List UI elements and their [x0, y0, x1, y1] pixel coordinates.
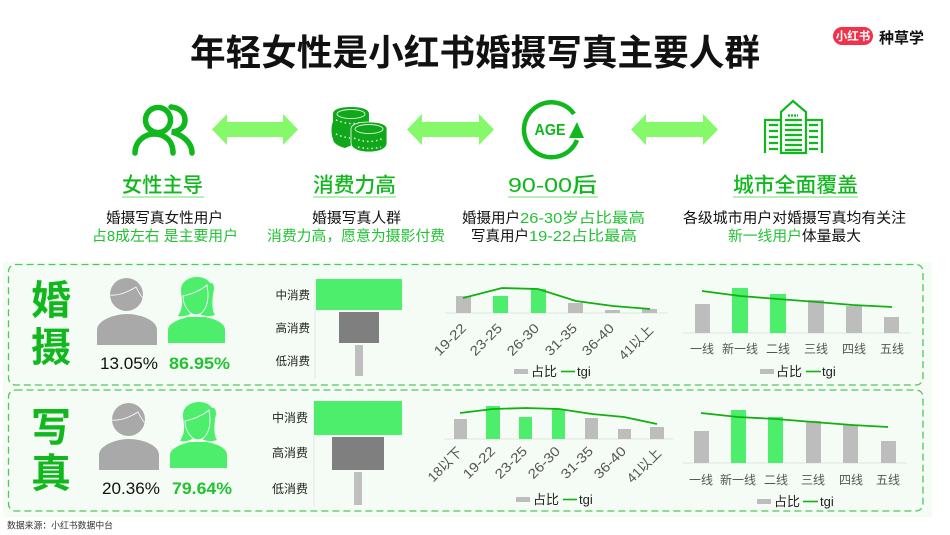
text block: city: [683, 209, 906, 245]
funnel chart: spending: 高消费: [272, 445, 308, 460]
heading: 城市全面覆盖: 城市全面覆盖: [733, 174, 858, 197]
arrow: coins to age: [407, 114, 494, 145]
text block: age: 写真用户19-22占比最高: [471, 227, 637, 245]
heading: 婚摄: 摄: [31, 326, 71, 370]
icon: age cycle: AGE: [534, 122, 566, 139]
bar line chart: city: 二线: [766, 342, 790, 356]
text block: female users: 占8成左右 是主要用户: [92, 228, 238, 245]
bar line chart: age: [425, 406, 673, 507]
bar line chart: age: 26-30: [504, 321, 542, 359]
bar line chart: age: tgi: [579, 492, 593, 507]
text block: spending: 消费力高，愿意为摄影付费: [267, 227, 445, 245]
heading: 婚摄: [31, 279, 71, 370]
icon: male user: [99, 403, 159, 470]
text block: spending: [267, 209, 445, 245]
source note: 数据来源：小红书数据中台: [7, 520, 113, 530]
icon: coins: [332, 107, 387, 152]
arrow: age to city: [631, 114, 718, 145]
heading: 写真: 真: [31, 452, 71, 496]
bar line chart: age: 占比: [531, 364, 557, 379]
icon: male user: [97, 278, 157, 345]
funnel chart: spending: 低消费: [272, 482, 308, 496]
bar line chart: city: tgi: [820, 494, 834, 509]
logo: 小红书种草学: [833, 27, 924, 47]
funnel chart: spending: [272, 401, 402, 506]
heading: 写真: [31, 406, 71, 496]
bar line chart: city: 占比: [776, 364, 802, 379]
text block: age: [462, 210, 645, 245]
panel: 写真: [8, 390, 923, 511]
heading: 婚摄: 婚: [31, 279, 71, 323]
panel: 婚摄: [8, 264, 923, 385]
male share: 20.36%: [102, 480, 160, 498]
bar line chart: city: 三线: [804, 342, 828, 356]
bar line chart: age: 31-35: [542, 321, 580, 359]
bar line chart: age: [431, 288, 668, 379]
icon: users: [135, 107, 192, 153]
title: 年轻女性是小红书婚摄写真主要人群: [190, 32, 760, 73]
male share: 13.05%: [100, 355, 158, 373]
female share: 86.95%: [169, 355, 230, 373]
icon: age cycle: [524, 102, 584, 157]
bar line chart: age: tgi: [577, 364, 591, 379]
bar line chart: city: [683, 410, 907, 509]
icon: city buildings: [765, 101, 822, 153]
bar line chart: age: 26-30: [525, 444, 563, 482]
text block: female users: 婚摄写真女性用户: [106, 209, 223, 227]
bar line chart: city: 四线: [842, 342, 866, 356]
bar line chart: age: 18以下: [425, 445, 465, 485]
text block: city: 新一线用户体量最大: [728, 228, 861, 245]
bar line chart: city: 一线: [690, 342, 714, 356]
funnel chart: spending: 中消费: [276, 288, 310, 302]
heading: 消费力高: 消费力高: [313, 174, 396, 197]
bar line chart: age: 23-25: [467, 321, 505, 359]
funnel chart: spending: 低消费: [276, 354, 310, 368]
bar line chart: city: [683, 288, 911, 379]
bar line chart: city: 四线: [839, 473, 863, 487]
bar line chart: city: 新一线: [720, 472, 756, 487]
bar line chart: age: 36-40: [579, 321, 617, 359]
bar line chart: city: 新一线: [722, 341, 758, 356]
bar line chart: age: 占比: [533, 492, 559, 507]
icon: female user: [170, 402, 227, 468]
arrow: users to coins: [212, 114, 298, 145]
bar line chart: city: tgi: [822, 364, 836, 379]
bar line chart: city: 占比: [774, 494, 800, 509]
icon: female user: [168, 277, 225, 343]
bar line chart: age: 31-35: [558, 444, 596, 482]
bar line chart: age: 19-22: [431, 321, 469, 359]
funnel chart: spending: [276, 279, 402, 378]
heading: 90-00后: 90-00后: [508, 174, 597, 197]
text block: age: 婚摄用户26-30岁占比最高: [462, 210, 645, 227]
logo: 小红书种草学: 小红书: [836, 29, 871, 43]
bar line chart: city: 三线: [801, 473, 825, 487]
bar line chart: city: 二线: [764, 473, 788, 487]
funnel chart: spending: 高消费: [276, 321, 310, 335]
bar line chart: city: 五线: [876, 473, 900, 487]
bar line chart: age: 23-25: [492, 444, 530, 482]
bar line chart: age: 41以上: [616, 323, 656, 363]
text block: spending: 婚摄写真人群: [312, 209, 401, 227]
female share: 79.64%: [172, 480, 232, 498]
text block: city: 各级城市用户对婚摄写真均有关注: [683, 209, 906, 227]
heading: 写真: 写: [31, 406, 71, 450]
text block: female users: [92, 209, 238, 245]
bar line chart: city: 五线: [880, 342, 904, 356]
funnel chart: spending: 中消费: [272, 410, 308, 425]
bar line chart: age: 36-40: [591, 444, 629, 482]
heading: 女性主导: 女性主导: [122, 174, 203, 197]
bar line chart: age: 19-22: [460, 444, 498, 482]
logo: 小红书种草学: 种草学: [879, 29, 924, 47]
bar line chart: city: 一线: [689, 473, 713, 487]
bar line chart: age: 41以上: [624, 446, 664, 486]
